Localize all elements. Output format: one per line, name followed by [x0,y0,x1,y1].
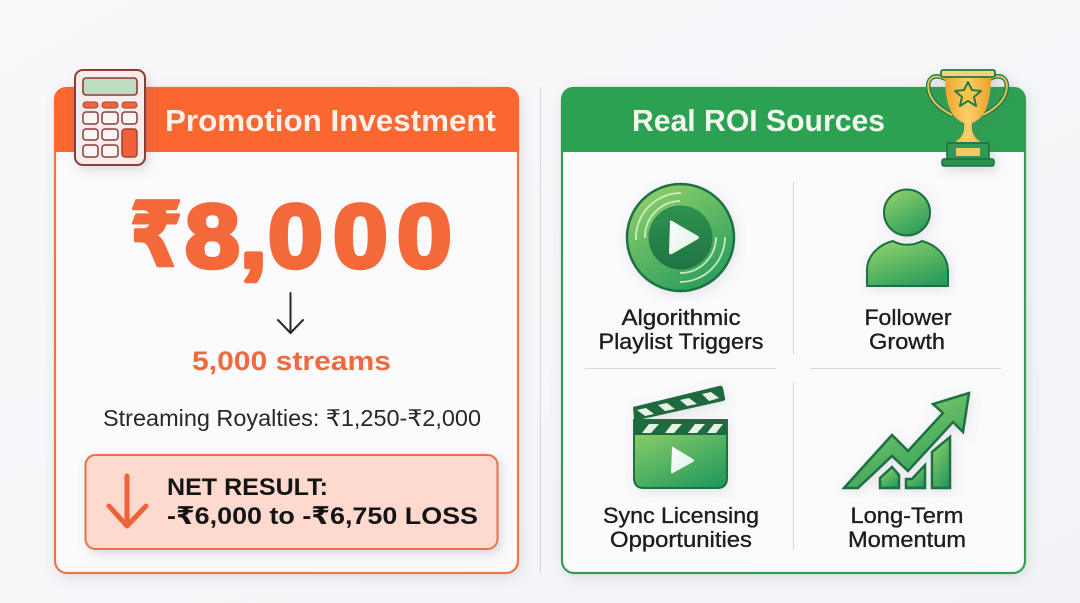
header bar: promotion investment [54,87,519,152]
label: long-term momentum: Long-Term [850,503,964,528]
streams count: 5,000 streams [192,346,391,376]
label: sync licensing opportunities: Opportunities [610,527,752,552]
label: algorithmic playlist triggers: Algorithmic [622,305,740,330]
streaming royalties: Streaming Royalties: ₹1,250-₹2,000 [103,405,481,431]
label: sync licensing opportunities: Sync Licensing [603,503,759,528]
label: follower growth: Follower [864,305,952,330]
label: follower growth: Growth [869,329,945,354]
icon: person [867,190,948,286]
panel: promotion investment [54,70,519,573]
icon: play disc [627,184,734,291]
icon: trophy [928,70,1007,166]
big amount: 8,000 [185,186,452,286]
icon: clapperboard [633,386,727,488]
heading: real ROI sources: Real ROI Sources [632,104,885,138]
label: follower growth [864,305,952,354]
net result text [167,474,478,530]
callout: net result [86,455,498,549]
panel: real ROI sources [561,70,1026,573]
label: sync licensing opportunities [603,503,759,552]
big amount: ₹ [129,186,183,286]
icon: down arrow [109,476,146,526]
label: algorithmic playlist triggers: Playlist Triggers [598,329,764,354]
icon: calculator [75,70,145,165]
net result text: NET RESULT: [167,474,328,501]
infographic canvas [53,69,1032,582]
net result text: -₹6,000 to -₹6,750 LOSS [167,503,478,530]
arrow: cost to streams [278,293,303,333]
heading: promotion investment: Promotion Investment [165,104,496,138]
label: long-term momentum: Momentum [848,527,966,552]
label: long-term momentum [848,503,966,552]
label: algorithmic playlist triggers [598,305,764,354]
icon: growth arrow chart [844,393,969,488]
header bar: real ROI sources [561,87,1026,152]
